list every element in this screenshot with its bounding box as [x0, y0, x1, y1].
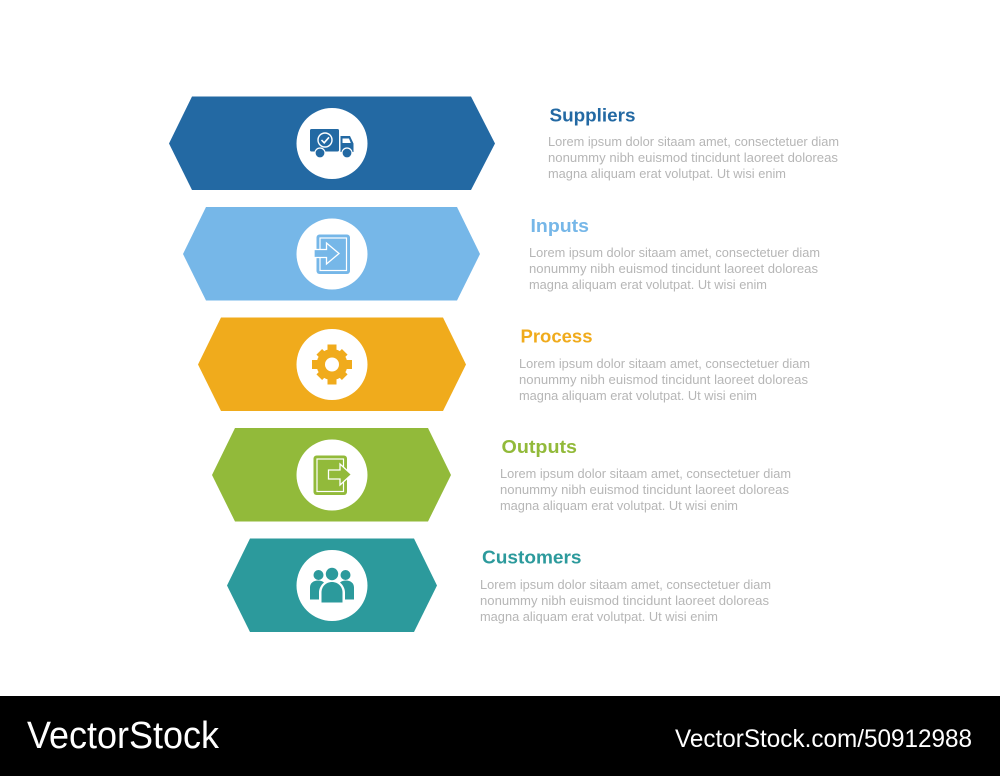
icon: sign out arrow [296, 440, 368, 510]
hexagon: Process [198, 318, 466, 411]
text block: Customers [480, 577, 771, 624]
text block: Suppliers: Lorem ipsum dolor sitaam amet, consectetuer diam [548, 134, 839, 149]
icon: group of people [296, 550, 368, 621]
hexagon: Outputs [212, 428, 451, 522]
step: Inputs [183, 207, 820, 300]
icon: delivery truck [296, 108, 368, 179]
heading: Customers: Customers [482, 548, 582, 568]
text block: Process [519, 356, 810, 403]
text block: Outputs [500, 466, 791, 513]
text block: Inputs: Lorem ipsum dolor sitaam amet, consectetuer diam [529, 245, 820, 260]
text block: Customers: magna aliquam erat volutpat. Ut wisi enim [480, 609, 718, 624]
text block: Suppliers: magna aliquam erat volutpat. Ut wisi enim [548, 166, 786, 181]
text block: Inputs [529, 245, 820, 292]
text block: Customers: nonummy nibh euismod tincidunt laoreet doloreas [480, 593, 770, 608]
icon: sign in arrow [296, 218, 368, 290]
heading: Process: Process [520, 326, 592, 346]
text block: Process: nonummy nibh euismod tincidunt laoreet doloreas [519, 372, 809, 387]
text block: Inputs: magna aliquam erat volutpat. Ut wisi enim [529, 277, 767, 292]
hexagon: Customers [227, 538, 437, 632]
text block: Customers: Lorem ipsum dolor sitaam amet, consectetuer diam [480, 577, 771, 592]
footer band [0, 696, 1000, 776]
text block: Suppliers [548, 134, 839, 181]
hexagon: Inputs [183, 207, 480, 300]
text block: Outputs: magna aliquam erat volutpat. Ut wisi enim [500, 498, 738, 513]
step: Outputs [212, 428, 791, 522]
step: Process [198, 318, 810, 411]
text block: Suppliers: nonummy nibh euismod tincidunt laoreet doloreas [548, 150, 839, 165]
text block: Outputs: Lorem ipsum dolor sitaam amet, consectetuer diam [500, 466, 791, 481]
step: Customers [227, 538, 771, 632]
text block: Process: Lorem ipsum dolor sitaam amet, consectetuer diam [519, 356, 810, 371]
text block: Process: magna aliquam erat volutpat. Ut wisi enim [519, 388, 757, 403]
text block: Inputs: nonummy nibh euismod tincidunt laoreet doloreas [529, 261, 819, 276]
hexagon: Suppliers [169, 96, 495, 190]
heading: Inputs: Inputs [530, 216, 589, 236]
icon: gear [296, 329, 368, 400]
text block: Outputs: nonummy nibh euismod tincidunt laoreet doloreas [500, 482, 790, 497]
heading: Suppliers: Suppliers [550, 106, 636, 126]
image id: VectorStock.com/50912988 [675, 725, 972, 753]
brand name: VectorStock [27, 715, 220, 757]
step: Suppliers [169, 96, 839, 190]
heading: Outputs: Outputs [502, 437, 577, 457]
